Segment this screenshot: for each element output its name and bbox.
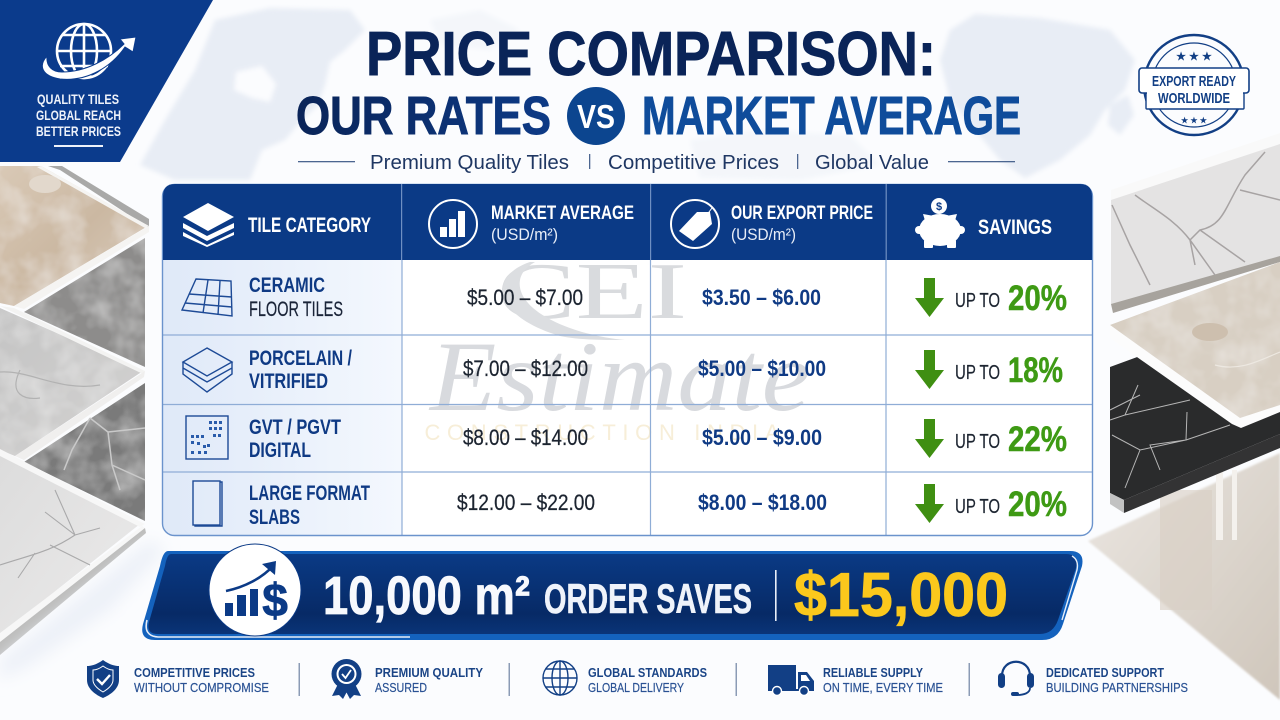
callout: savings banner: $15,000 [794,561,1008,630]
row: porcelain vitrified: UP TO [955,362,1000,384]
watermark: CONSTRUCTION INDIA [424,420,780,445]
feature: premium quality: PREMIUM QUALITY [375,665,483,680]
row: porcelain vitrified: VITRIFIED [249,370,328,393]
feature: reliable supply [768,665,943,696]
panel: comparison table [162,184,1092,536]
icon: down arrow [915,419,944,458]
row: ceramic floor tiles: $3.50 – $6.00 [702,285,821,310]
feature: dedicated support: BUILDING PARTNERSHIPS [1046,680,1188,695]
row: ceramic floor tiles: UP TO [955,290,1000,312]
tile: grey backing [48,166,149,228]
panel: right tile stack [1088,133,1280,700]
table header: MARKET AVERAGE [491,203,634,224]
title: MARKET AVERAGE [642,86,1021,146]
row: ceramic floor tiles: CERAMIC [249,274,325,297]
badge text: QUALITY TILES [37,91,119,107]
background world map [140,8,1135,180]
tile: white marble [1111,141,1280,305]
panel: logo badge [0,0,213,162]
callout: savings banner [142,544,1082,640]
icon: price tag circle [671,200,719,248]
panel: left floor shadow [0,540,165,680]
row: large format slabs: 20% [1008,485,1067,524]
icon: layered tiles [183,203,234,247]
tile: dark grey stone [24,383,145,521]
row: large format slabs: LARGE FORMAT [249,482,370,505]
row: gvt pgvt digital: $8.00 – $14.00 [463,425,588,450]
watermark [424,248,810,445]
tile: light grey stone [0,308,143,456]
callout: savings banner: ORDER SAVES [544,575,752,622]
feature: reliable supply: ON TIME, EVERY TIME [823,680,943,695]
feature: competitive prices [87,660,269,698]
subtitle: Competitive Prices [608,152,779,174]
icon: down arrow [915,278,944,317]
icon: down arrow [915,484,944,523]
icon: bar chart circle [429,200,477,248]
row: gvt pgvt digital: $5.00 – $9.00 [702,425,822,450]
row: large format slabs: $8.00 – $18.00 [698,490,827,515]
title [296,20,1021,146]
icon: piggy bank [915,198,965,248]
feature: global standards: GLOBAL DELIVERY [588,680,684,695]
feature: premium quality: ASSURED [375,680,427,695]
icon: tile stack [183,348,232,392]
row: porcelain vitrified: $7.00 – $12.00 [463,356,588,381]
first column tint [163,260,402,535]
feature: global standards: GLOBAL STANDARDS [588,665,707,680]
panel: feature strip [87,659,1188,699]
row: ceramic floor tiles [182,274,1067,321]
row: gvt pgvt digital: GVT / PGVT [249,416,341,439]
stamp: export ready worldwide: EXPORT READY [1152,73,1236,90]
row: gvt pgvt digital: UP TO [955,431,1000,453]
stamp: export ready worldwide: ★ ★ ★ [1181,116,1208,125]
row: ceramic floor tiles: 20% [1008,279,1067,318]
callout: savings banner: 10,000 m² [323,566,530,626]
table header: TILE CATEGORY [248,214,371,237]
stamp: export ready worldwide: WORLDWIDE [1158,90,1230,107]
tile: white marble [0,453,140,635]
subtitle: Premium Quality Tiles [370,152,569,174]
row: gvt pgvt digital [186,416,1067,462]
badge text: GLOBAL REACH [36,107,121,123]
feature: competitive prices: COMPETITIVE PRICES [134,665,255,680]
icon: floor grid [182,279,232,316]
vs badge [567,87,625,145]
feature: reliable supply: RELIABLE SUPPLY [823,665,923,680]
subtitle: Global Value [815,152,929,174]
feature: competitive prices: WITHOUT COMPROMISE [134,680,269,695]
table header [163,184,1092,260]
feature: premium quality [332,659,483,699]
row: ceramic floor tiles: $5.00 – $7.00 [467,285,583,310]
tile: grey stone [24,238,145,367]
title: OUR RATES [296,86,551,146]
icon: digital dots tile [186,416,228,459]
icon: truck [768,665,814,696]
feature: dedicated support: DEDICATED SUPPORT [1046,665,1164,680]
icon: down arrow [915,350,944,389]
feature: dedicated support [998,662,1188,696]
watermark: CEI [497,248,687,336]
watermark: Estimate [428,321,810,432]
tile: beige stone [0,166,148,306]
stamp: export ready worldwide [1139,35,1249,135]
row: large format slabs: SLABS [249,506,300,529]
icon: globe with arrow [42,24,136,79]
icon: headset [998,662,1034,696]
table header: SAVINGS [978,216,1052,239]
vs badge: VS [577,98,615,135]
icon: shield [87,660,119,698]
icon: growth dollar circle [209,544,301,636]
row: porcelain vitrified: 18% [1008,351,1063,390]
tile: black marble [1110,356,1280,500]
stamp: export ready worldwide: ★ ★ ★ [1176,51,1212,63]
row: large format slabs: UP TO [955,496,1000,518]
icon: globe [543,661,577,695]
title: PRICE COMPARISON: [366,20,936,89]
subtitle [298,152,1015,174]
row: gvt pgvt digital: 22% [1008,420,1067,459]
table header: OUR EXPORT PRICE [731,203,873,224]
row: large format slabs: $12.00 – $22.00 [457,490,595,515]
row: porcelain vitrified: $5.00 – $10.00 [698,356,826,381]
tile: beige stone [1110,262,1280,421]
icon: ribbon badge [332,659,362,699]
table header: (USD/m²) [491,225,558,244]
icon: piggy bank: $ [936,201,942,213]
feature: global standards [543,661,707,695]
badge text: BETTER PRICES [36,123,121,139]
tile: polished floor [1088,453,1280,700]
row: porcelain vitrified [183,347,1063,393]
row: large format slabs [193,481,1067,529]
icon: slab [193,481,222,526]
icon: growth dollar circle: $ [262,574,288,626]
row: gvt pgvt digital: DIGITAL [249,439,311,462]
panel: left tile stack [0,166,149,655]
table header: (USD/m²) [731,225,796,244]
badge text [36,91,121,139]
row: porcelain vitrified: PORCELAIN / [249,347,352,370]
row: ceramic floor tiles: FLOOR TILES [249,298,343,321]
table grid [162,184,1092,536]
